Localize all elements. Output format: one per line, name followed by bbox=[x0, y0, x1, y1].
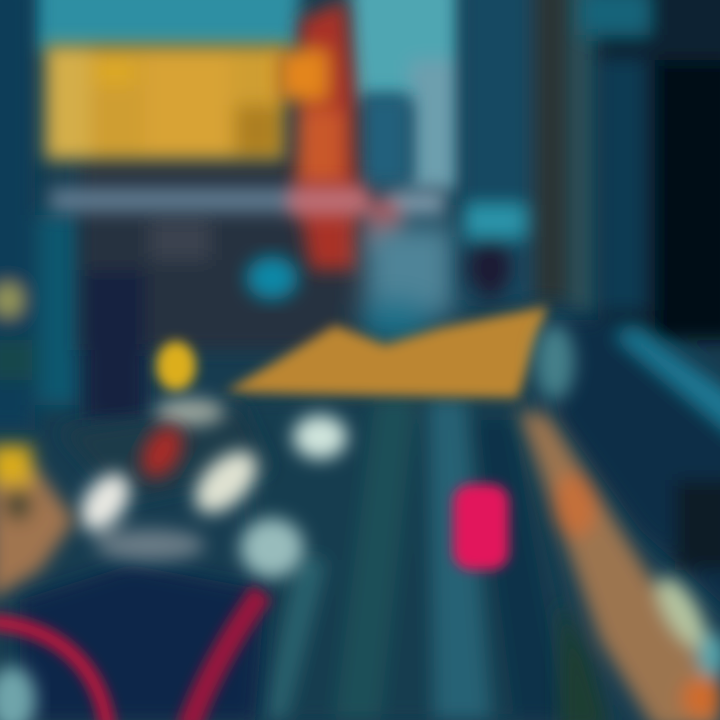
teal sign bbox=[246, 256, 298, 300]
red arc handlebar bbox=[0, 622, 108, 720]
building: left tower bbox=[0, 0, 80, 430]
red vehicle left bbox=[132, 419, 192, 485]
road surface bbox=[262, 398, 551, 720]
street centre: blue haze bbox=[357, 225, 455, 342]
pale blue corner bbox=[0, 666, 36, 720]
pink-red car bbox=[453, 484, 509, 570]
building: red tower bbox=[278, 0, 358, 270]
building: yellow block bbox=[45, 45, 285, 160]
white car lights bbox=[70, 398, 347, 578]
lower left dark foreground bbox=[20, 405, 270, 720]
tan hand at left bbox=[0, 445, 75, 600]
building: mid-ground dark block bbox=[80, 95, 410, 420]
building: far right dark facade bbox=[540, 0, 720, 620]
right sidewalk strip bbox=[518, 324, 720, 720]
sky bbox=[30, 0, 460, 190]
road: golden horizon band bbox=[225, 306, 548, 398]
yellow signal light bbox=[156, 341, 196, 391]
banner: pale horizontal band bbox=[50, 186, 445, 253]
building: right teal tower bbox=[462, 0, 598, 310]
red diagonal bar bbox=[188, 592, 262, 720]
